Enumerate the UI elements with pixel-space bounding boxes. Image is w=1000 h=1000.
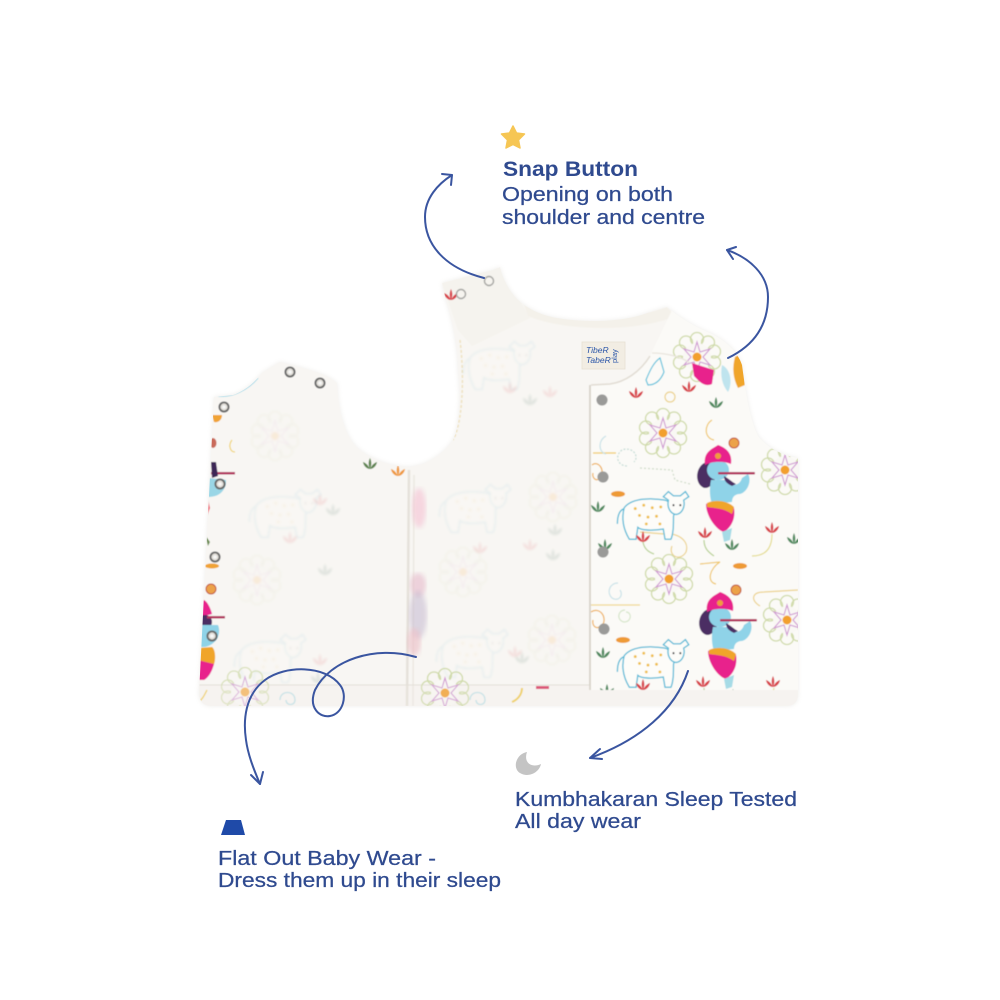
- arrow: up-right from neckline shoulder: [727, 247, 768, 358]
- krishna figures: [697, 438, 755, 542]
- text block: flat out baby wear: [218, 847, 501, 892]
- icon: grey crescent moon: [516, 752, 541, 775]
- text block: snap button: [502, 158, 705, 229]
- bottom hem shading: [200, 685, 549, 706]
- brand label: TabeR: [586, 355, 611, 365]
- cows: [617, 492, 689, 539]
- neck band: [526, 307, 670, 327]
- text block: snap button: Opening on both: [502, 183, 673, 206]
- shoulder fragments of the print: [692, 363, 714, 385]
- centre seam: [407, 470, 409, 706]
- arrow: down to sleep tested note: [590, 671, 688, 759]
- text block: flat out baby wear: Flat Out Baby Wear -: [218, 847, 436, 870]
- top-left shoulder trim print: [218, 378, 258, 396]
- red and green sprigs: [636, 531, 650, 542]
- hem swirls: [198, 688, 522, 704]
- front flap with print: [590, 312, 798, 690]
- arrow: looping down to flat out note: [245, 653, 416, 784]
- brand label: [582, 342, 625, 369]
- small orange birds: [611, 491, 625, 497]
- text block: sleep tested: [515, 788, 797, 833]
- text block: sleep tested: All day wear: [515, 810, 641, 833]
- icon: yellow star: [502, 126, 524, 148]
- snap buttons: [208, 276, 610, 640]
- armhole stitched trims: [453, 340, 462, 440]
- armhole sprigs: [363, 458, 377, 469]
- flowers: [640, 408, 686, 458]
- pink and grey show-through at seam: [412, 488, 426, 528]
- text block: snap button: Snap Button: [503, 158, 638, 181]
- front placket edge: [589, 385, 591, 690]
- garment: flat-laid baby vest: [190, 260, 810, 718]
- shoulder yoke shading: [442, 267, 530, 346]
- text block: flat out baby wear: Dress them up in their sleep: [218, 869, 501, 892]
- bottom hem: [199, 684, 590, 686]
- icon: blue trapezoid garment: [221, 820, 245, 835]
- brand label: play: [610, 349, 619, 363]
- infographic canvas: [198, 125, 798, 892]
- garment base fabric: [190, 260, 810, 718]
- faint show-through print: [234, 342, 576, 682]
- left edge print: fragments wrapping from the front: [198, 415, 235, 680]
- text block: snap button: shoulder and centre: [502, 206, 705, 229]
- brand label: TibeR: [586, 345, 609, 355]
- text block: sleep tested: Kumbhakaran Sleep Tested: [515, 788, 797, 811]
- garment soft shadow: [199, 267, 798, 706]
- coloured swirls and stems: [591, 420, 798, 706]
- faint show-through sprigs: [283, 382, 562, 683]
- arrow: up-left from shoulder snap: [425, 174, 484, 278]
